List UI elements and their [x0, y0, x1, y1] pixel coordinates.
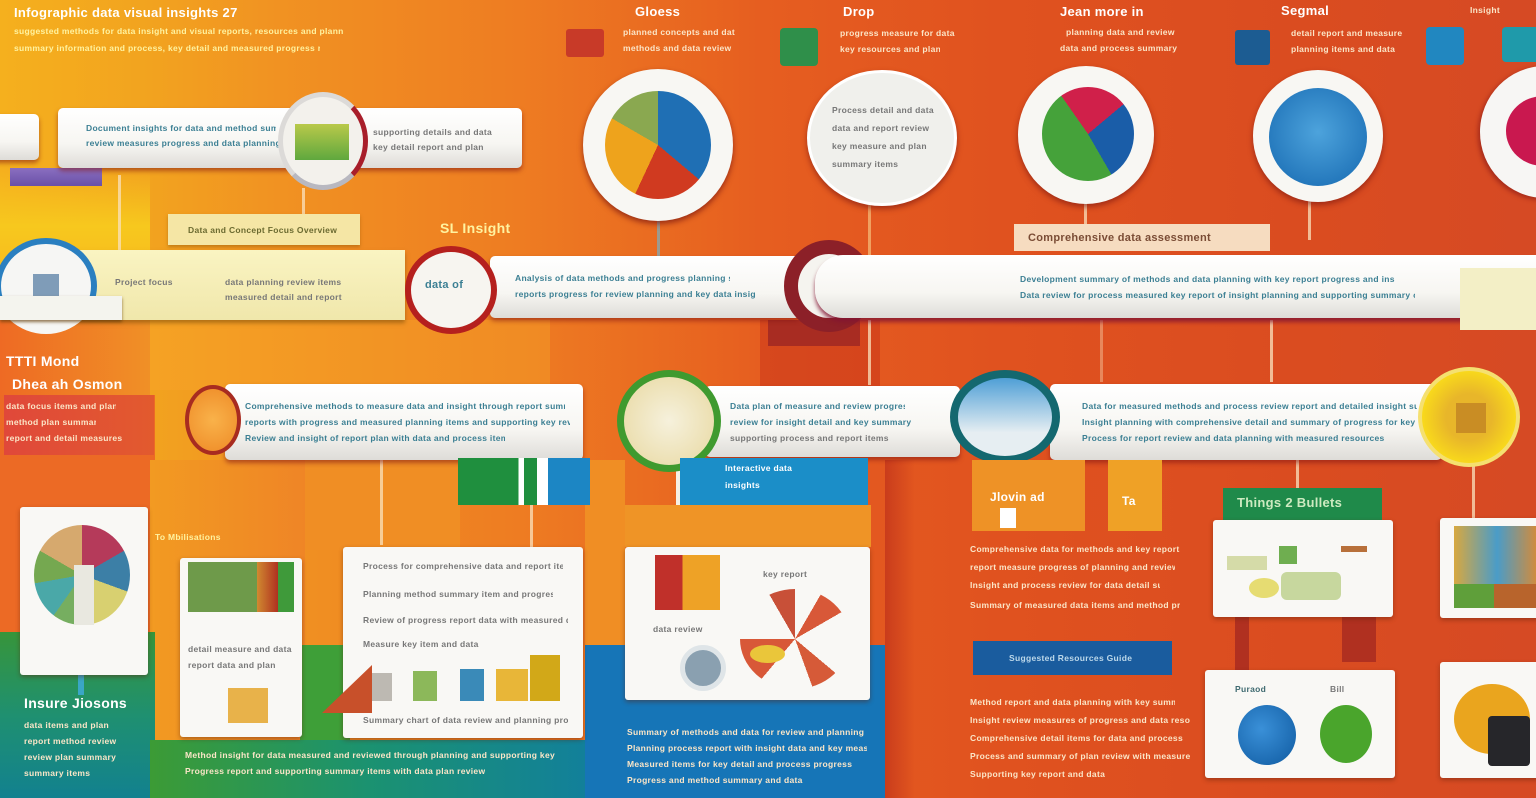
icon: red tile	[566, 29, 604, 57]
text block: blue panel: Progress and method summary and data	[627, 775, 803, 785]
icon: green ring circle	[617, 370, 721, 472]
header item 2	[780, 5, 955, 66]
text block: bottom left teal: review plan summary	[24, 752, 116, 762]
card: green sheet: detail measure and data	[188, 644, 292, 654]
block: blue header: Interactive data	[725, 463, 792, 473]
icon: red ring circle: data of	[425, 279, 463, 291]
header item 1	[566, 5, 735, 57]
header item 2: progress measure for data	[840, 28, 955, 38]
text block: right column lower: Supporting key report and data	[970, 769, 1105, 779]
tile: orange right	[1108, 460, 1162, 531]
card: mind map	[20, 507, 148, 675]
text block: blue panel	[627, 727, 867, 785]
card: green diagram	[1213, 520, 1393, 617]
panel: band 3 middle: supporting process and report items	[730, 433, 889, 443]
card: globes	[1205, 670, 1395, 778]
block: orange band	[625, 505, 871, 547]
card: globes: Bill	[1330, 684, 1344, 694]
panel: band 1	[58, 108, 522, 168]
icon: blue globe circle	[1253, 70, 1383, 202]
icon: blue tile right	[1426, 27, 1464, 65]
panel: red block	[4, 395, 154, 455]
card: bar chart	[343, 547, 583, 738]
panel: long white bar	[815, 255, 1536, 318]
arrow: red wedge	[322, 665, 372, 713]
label: peach tag	[1014, 224, 1270, 251]
icon: text circle: key measure and plan	[832, 141, 927, 151]
icon: green globe	[1320, 705, 1372, 763]
icon: crimson circle right	[1480, 66, 1536, 198]
icon: band 1 circle	[278, 92, 368, 190]
icon: right tag	[1460, 268, 1536, 330]
text block: bottom left teal: summary items	[24, 768, 90, 778]
icon: text circle	[807, 70, 957, 206]
label: yellow tag	[168, 214, 360, 245]
panel: band 2 white	[490, 256, 800, 318]
icon: blue ring circle	[0, 238, 97, 334]
button: blue	[973, 641, 1172, 675]
bar chart	[372, 655, 560, 701]
text block: right column upper	[970, 544, 1180, 610]
icon: green tile	[780, 28, 818, 66]
header item 3	[1060, 5, 1177, 53]
left bar piece top	[0, 114, 39, 160]
icon: text circle: Process detail and data	[832, 105, 934, 115]
text block: bottom left teal: report method review	[24, 736, 116, 746]
tab: green header	[1223, 488, 1382, 521]
block: blue header: insights	[725, 480, 760, 490]
label: top right: Insight	[1470, 5, 1500, 15]
header item 2: key resources and plan	[840, 44, 940, 54]
panel: band 1: supporting details and data	[373, 127, 492, 137]
purple base	[10, 168, 102, 186]
block: blue header	[680, 458, 868, 505]
white base left	[0, 296, 122, 320]
card: pie diagram	[625, 547, 870, 700]
panel: band 1: key detail report and plan	[373, 142, 484, 152]
icon: blue globe	[1238, 705, 1296, 765]
panel: band 2 yellow: data planning review items	[225, 277, 341, 287]
icon: pie circle 1	[583, 69, 733, 221]
text block: bottom left teal: data items and plan	[24, 720, 109, 730]
header item 1: methods and data review	[623, 43, 731, 53]
icon: orange circle	[185, 385, 241, 455]
block: green and blue tabs	[458, 458, 590, 505]
header item 4: detail report and measure	[1291, 28, 1402, 38]
button: blue: Suggested Resources Guide	[1009, 653, 1132, 663]
label: yellow tag: Data and Concept Focus Overview	[188, 225, 337, 235]
text block: bottom band: Progress report and supporting summary items with data plan review	[185, 766, 485, 776]
block: mid left text	[6, 353, 122, 392]
panel: band 2 yellow: measured detail and report	[225, 292, 342, 302]
card: pie diagram: data review	[653, 624, 703, 634]
text block: bottom left teal	[24, 695, 127, 778]
card: green sheet: report data and plan	[188, 660, 276, 670]
header item 4: planning items and data	[1291, 44, 1395, 54]
icon: dark blue tile	[1235, 30, 1270, 65]
icon: teal tile right	[1502, 27, 1536, 62]
label: small caption: To Mbilisations	[155, 532, 221, 542]
panel: band 2 yellow: Project focus	[115, 277, 173, 287]
icon: text circle: data and report review	[832, 123, 929, 133]
icon: red ring circle	[405, 246, 497, 334]
text block: bottom left teal: Insure Jiosons	[24, 695, 127, 711]
tile: orange right: Ta	[1122, 494, 1136, 508]
card: globes: Puraod	[1235, 684, 1266, 694]
icon: text circle: summary items	[832, 159, 898, 169]
label: peach tag: Comprehensive data assessment	[1028, 232, 1211, 244]
panel: red block: report and detail measures	[6, 433, 122, 443]
card: green sheet	[180, 558, 302, 737]
block: mid left text: Dhea ah Osmon	[12, 376, 122, 392]
panel: band 3 middle: review for insight detail and key summary	[730, 417, 911, 427]
card: right bottom image	[1440, 662, 1536, 778]
card: bar chart: Measure key item and data	[363, 639, 479, 649]
heading: top left	[14, 6, 344, 53]
panel: band 3 right	[1050, 384, 1442, 460]
header item 3: planning data and review	[1066, 27, 1175, 37]
tile: orange left	[972, 460, 1085, 531]
icon: dark red ring	[784, 240, 874, 332]
icon: teal ring circle	[950, 370, 1060, 464]
panel: red block: data focus items and plan	[6, 401, 116, 411]
panel: band 3 left	[225, 384, 583, 460]
panel: band 3 right: Process for report review and data planning with measured resources	[1082, 433, 1385, 443]
header item 4	[1235, 4, 1402, 65]
card: pie diagram: key report	[763, 569, 807, 579]
tile: orange left: Jlovin ad	[990, 490, 1045, 504]
block: mid left text: TTTI Mond	[6, 353, 79, 369]
panel: band 2 yellow	[70, 250, 405, 320]
card: right image	[1440, 518, 1536, 618]
header item 3: data and process summary	[1060, 43, 1177, 53]
text block: right column lower	[970, 697, 1190, 779]
label: SL text: SL Insight	[440, 220, 510, 236]
icon: pie circle 2	[1018, 66, 1154, 204]
text block: bottom band	[185, 750, 555, 776]
icon: yellow circle	[1418, 367, 1520, 467]
panel: band 3 middle	[705, 386, 960, 457]
